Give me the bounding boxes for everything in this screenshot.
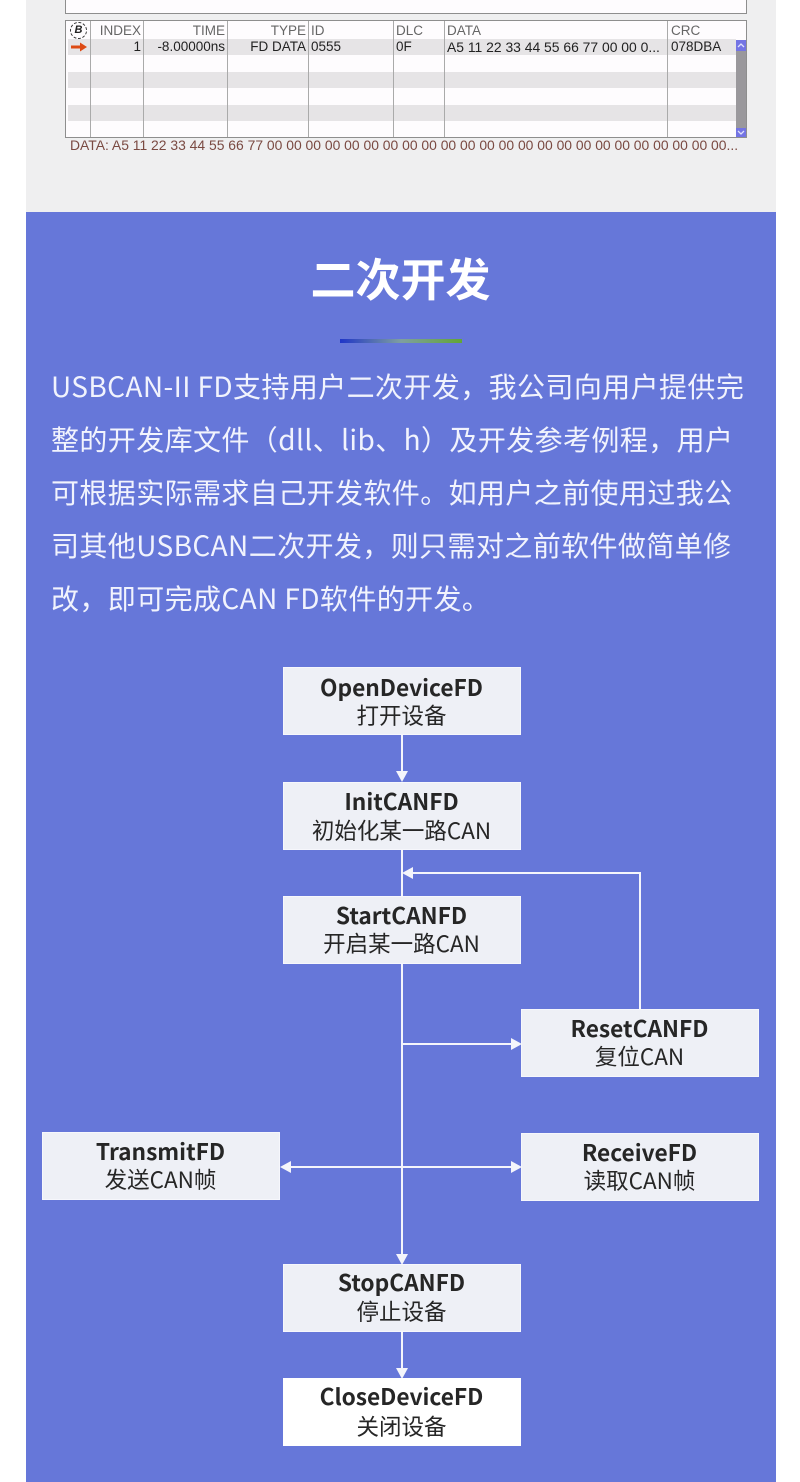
icon: breakpoint B: B (75, 24, 82, 36)
box: ResetCANFD: 复位CAN (595, 1040, 684, 1072)
table row stripes (68, 39, 736, 55)
data detail line: DATA: A5 11 22 33 44 55 66 77 00 00 00 00 00 00 00 00 00 00 00 00 00 00 00 00 00 00 00 00 00 00 00 00... (70, 137, 738, 153)
box: StartCANFD: StartCANFD (336, 898, 467, 931)
text block: description: 司其他USBCAN二次开发，则只需对之前软件做简单修 (51, 525, 732, 565)
row value: crc: 078DBA (671, 39, 721, 54)
scrollbar (736, 40, 746, 137)
scroll up button (736, 40, 746, 51)
box: OpenDeviceFD (283, 667, 521, 735)
row value: id: 0555 (311, 39, 341, 54)
message table (65, 20, 747, 138)
row value: type: FD DATA (250, 39, 306, 54)
flowchart (42, 667, 759, 1446)
box: InitCANFD: InitCANFD (344, 784, 459, 817)
panel: software screenshot (26, 0, 776, 212)
box: StopCANFD: 停止设备 (356, 1295, 446, 1327)
row value: index: 1 (133, 39, 141, 54)
box: OpenDeviceFD: 打开设备 (356, 699, 446, 731)
header: TIME: TIME (193, 23, 225, 38)
row value: data: A5 11 22 33 44 55 66 77 00 00 0... (447, 39, 660, 55)
text block: description: 整的开发库文件（dll、lib、h）及开发参考例程，用户 (51, 419, 733, 459)
row value: dlc: 0F (396, 39, 412, 54)
icon: red arrow (71, 42, 87, 52)
box: CloseDeviceFD: 关闭设备 (356, 1410, 446, 1442)
box: StartCANFD (283, 896, 521, 964)
box: ResetCANFD (521, 1009, 759, 1077)
box: StopCANFD (283, 1264, 521, 1332)
row value: time: -8.00000ns (157, 39, 225, 54)
header: CRC: CRC (671, 23, 700, 38)
header: INDEX: INDEX (100, 23, 141, 38)
text block: description: 可根据实际需求自己开发软件。如用户之前使用过我公 (51, 472, 733, 512)
text block: description (51, 366, 744, 618)
header: TYPE: TYPE (271, 23, 306, 38)
box: ReceiveFD: 读取CAN帧 (584, 1164, 695, 1196)
title underline (340, 339, 462, 343)
box: StartCANFD: 开启某一路CAN (323, 927, 480, 959)
box: ReceiveFD (521, 1133, 759, 1201)
header: ID: ID (311, 23, 324, 38)
box: TransmitFD: TransmitFD (96, 1134, 225, 1167)
box: ReceiveFD: ReceiveFD (582, 1135, 697, 1168)
text block: description: 改，即可完成CAN FD软件的开发。 (51, 578, 490, 618)
box: InitCANFD (283, 782, 521, 850)
box: TransmitFD: 发送CAN帧 (105, 1163, 216, 1195)
column separators (90, 21, 91, 137)
header: DATA: DATA (447, 23, 481, 38)
screenshot upper window (65, 0, 747, 14)
scroll down button (736, 128, 746, 137)
flow arrows (280, 735, 641, 1378)
box: StopCANFD: StopCANFD (338, 1265, 465, 1298)
icon: breakpoint B (70, 22, 87, 39)
box: InitCANFD: 初始化某一路CAN (312, 814, 491, 846)
text block: description: USBCAN-II FD支持用户二次开发，我公司向用户提供完 (51, 366, 744, 406)
box: CloseDeviceFD: CloseDeviceFD (320, 1379, 483, 1412)
box: OpenDeviceFD: OpenDeviceFD (320, 670, 483, 703)
title: 二次开发 (310, 244, 490, 309)
box: TransmitFD (42, 1132, 280, 1200)
box: CloseDeviceFD (283, 1378, 521, 1446)
header: DLC: DLC (396, 23, 423, 38)
box: ResetCANFD: ResetCANFD (571, 1011, 708, 1044)
